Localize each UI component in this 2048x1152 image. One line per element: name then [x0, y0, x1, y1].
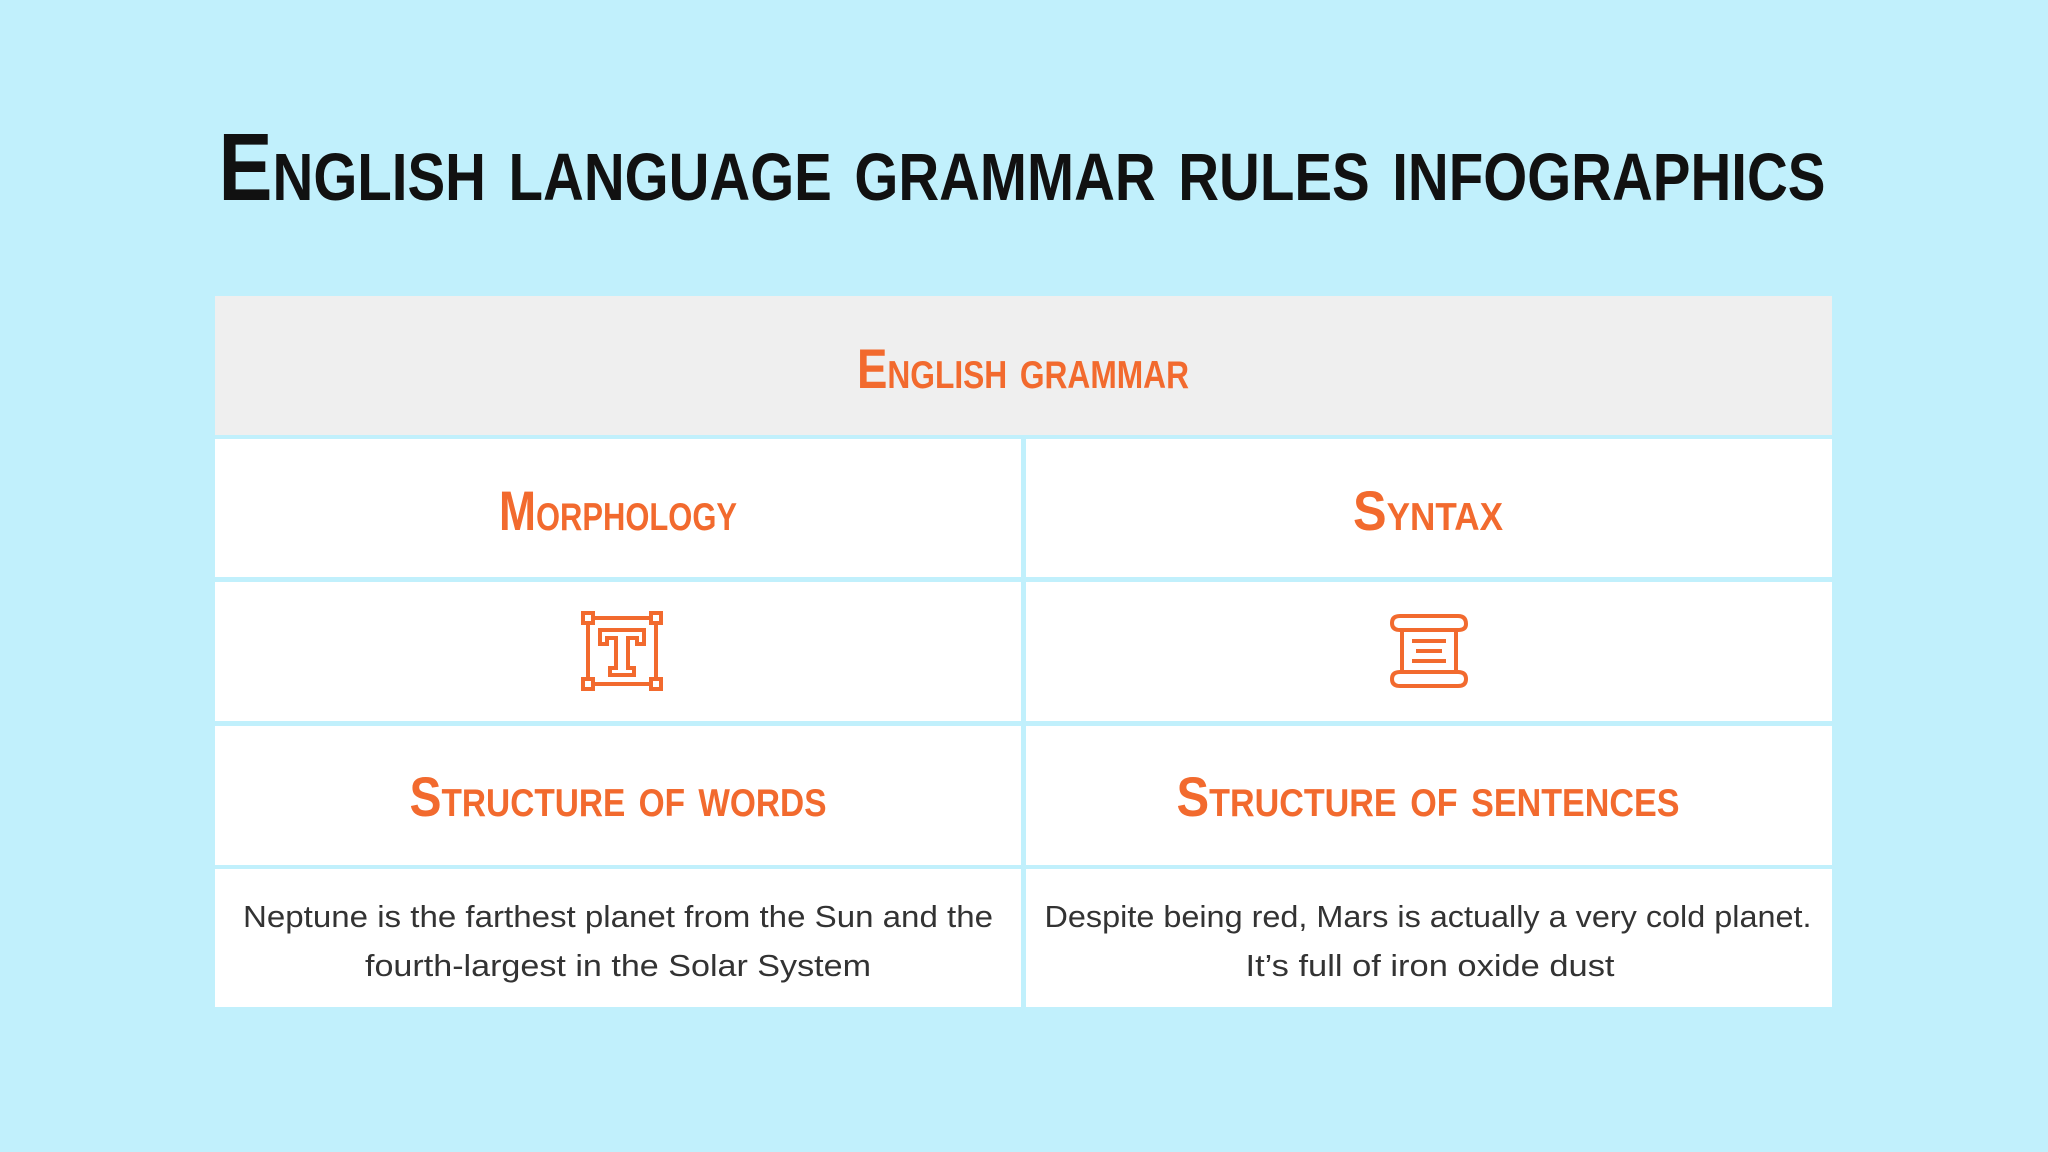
panel: syntax column [1026, 439, 1832, 1007]
text block: morphology description: Neptune is the farthest planet from the Sun and the [243, 899, 993, 934]
header row: English grammar [215, 296, 1832, 435]
heading: syntax: Syntax [1353, 479, 1503, 542]
subheading: structure of sentences: Structure of sentences [1176, 765, 1680, 828]
panel: morphology column: fourth-largest in the Solar System [365, 948, 871, 983]
subheading: structure of words: Structure of words [410, 765, 826, 828]
table [215, 296, 1832, 1007]
icon: scroll [1392, 616, 1466, 686]
header row: English grammar: English grammar [857, 337, 1189, 400]
text block: syntax description: Despite being red, Mars is actually a very cold planet. [1044, 899, 1812, 934]
panel: morphology column [215, 439, 1021, 1007]
heading: morphology: Morphology [499, 479, 737, 542]
icon: text T frame [583, 613, 661, 689]
panel: syntax column: It’s full of iron oxide dust [1246, 948, 1615, 983]
